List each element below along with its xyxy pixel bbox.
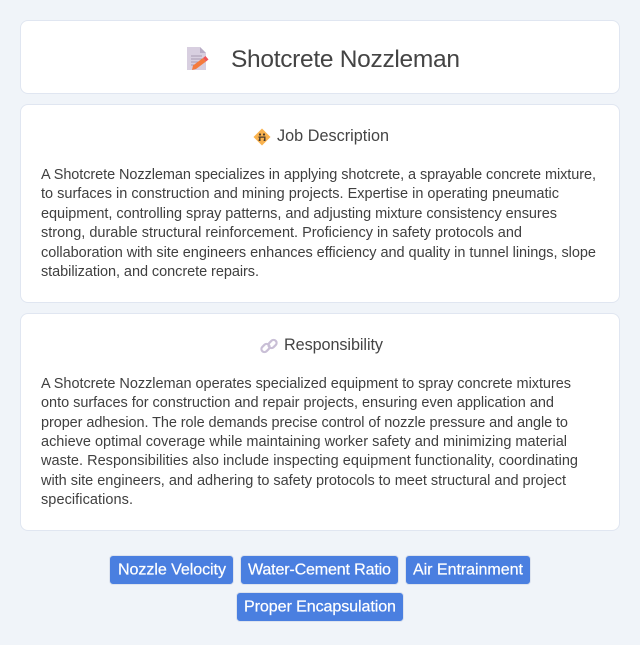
panel: title <box>20 20 620 94</box>
text block: responsibility: onto surfaces for construction and repair projects, ensuring even application and <box>41 395 554 411</box>
tag: Water-Cement Ratio background <box>240 555 399 585</box>
heading: job description: Job Description <box>277 127 389 145</box>
tag: Proper Encapsulation background <box>236 592 404 622</box>
text block: responsibility <box>40 376 578 508</box>
text block: responsibility: specifications. <box>41 492 133 508</box>
title: Shotcrete Nozzleman <box>231 46 460 73</box>
text block: responsibility: proper adhesion. The role demands precise control of nozzle pressure and angle to <box>41 415 568 431</box>
text block: responsibility: achieve optimal coverage while maintaining worker safety and minimizing material <box>41 434 567 450</box>
tag: Nozzle Velocity background <box>109 555 234 585</box>
panel: job description <box>20 104 620 303</box>
text block: job description: equipment, controlling spray patterns, and adjusting mixture consistency ensures <box>41 206 557 222</box>
text block: responsibility: waste. Responsibilities also include inspecting equipment functionality, coordinating <box>40 453 578 469</box>
text block: job description: A Shotcrete Nozzleman specializes in applying shotcrete, a sprayable concrete mixture, <box>41 167 596 183</box>
tag label: Air Entrainment: Air Entrainment <box>413 560 524 578</box>
icon: memo with pencil <box>187 47 208 70</box>
tag: Air Entrainment background <box>405 555 531 585</box>
tag label: Proper Encapsulation: Proper Encapsulation <box>244 598 396 616</box>
icon: construction diamond <box>254 128 270 146</box>
text block: job description: collaboration with site engineers enhances efficiency and quality in tunnel linings, slope <box>41 245 596 261</box>
tag label: Water-Cement Ratio: Water-Cement Ratio <box>248 560 391 578</box>
icon: chain link <box>260 339 278 353</box>
text block: job description <box>41 167 596 280</box>
text block: responsibility: with site engineers, and adhering to safety protocols to meet structural and project <box>40 473 566 489</box>
text block: job description: to surfaces in construction and mining projects. Expertise in operating pneumatic <box>41 186 559 202</box>
text block: job description: stabilization, and concrete repairs. <box>41 264 259 280</box>
text block: responsibility: A Shotcrete Nozzleman operates specialized equipment to spray concrete mixtures <box>41 376 571 392</box>
text block: job description: strong, durable structural reinforcement. Proficiency in safety protocols and <box>41 225 522 241</box>
panel: responsibility <box>20 313 620 531</box>
tag label: Nozzle Velocity: Nozzle Velocity <box>118 560 227 578</box>
heading: responsibility: Responsibility <box>284 336 384 354</box>
